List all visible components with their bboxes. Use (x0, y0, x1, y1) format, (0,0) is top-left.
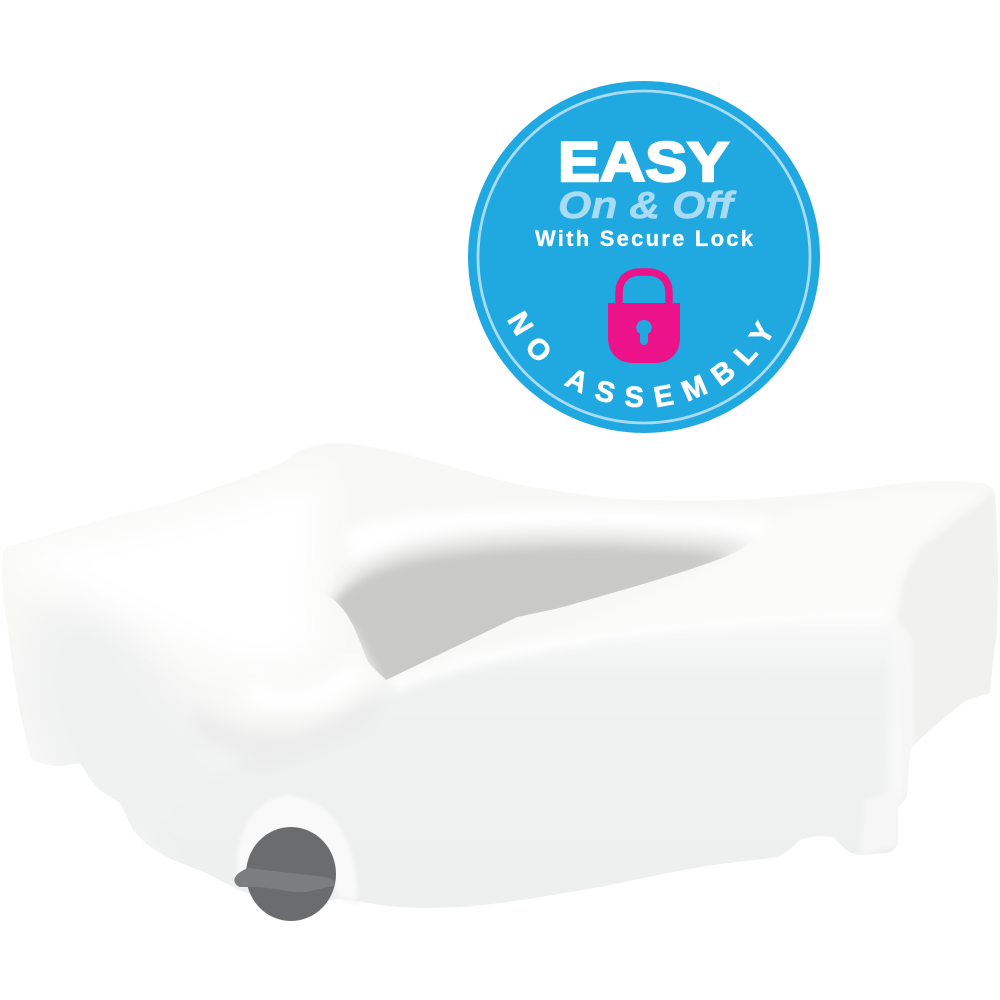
front face shading (266, 696, 894, 908)
left top highlight (95, 567, 166, 607)
heading: EASY: EASY (558, 130, 729, 193)
right side face (898, 492, 1000, 750)
hole floor (332, 547, 730, 690)
hand grip highlight (245, 665, 362, 701)
seat opening (332, 533, 750, 690)
curved label: NO ASSEMBLY: NO ASSEMBLY (507, 310, 772, 408)
knob recess (236, 795, 358, 903)
badge disc (468, 81, 820, 433)
lock knob assembly (234, 795, 358, 921)
saddle dip shading (214, 728, 281, 752)
front corner vertical light (894, 712, 901, 789)
back rim (748, 527, 749, 528)
icon: padlock (608, 272, 680, 363)
inner wall shadow (334, 527, 742, 670)
subheading: With Secure Lock: With Secure Lock (535, 226, 754, 251)
foot post (890, 838, 891, 839)
left face shading (25, 610, 260, 900)
seat body (7, 488, 998, 908)
raised toilet seat product (7, 488, 998, 921)
badge: easy on and off (468, 81, 820, 433)
knob disc (246, 827, 336, 921)
subheading: On & Off: On & Off (558, 185, 737, 227)
knob handle (234, 868, 334, 892)
badge inner ring (478, 91, 810, 423)
front ridge highlight (406, 668, 450, 684)
top right surface (540, 490, 985, 640)
